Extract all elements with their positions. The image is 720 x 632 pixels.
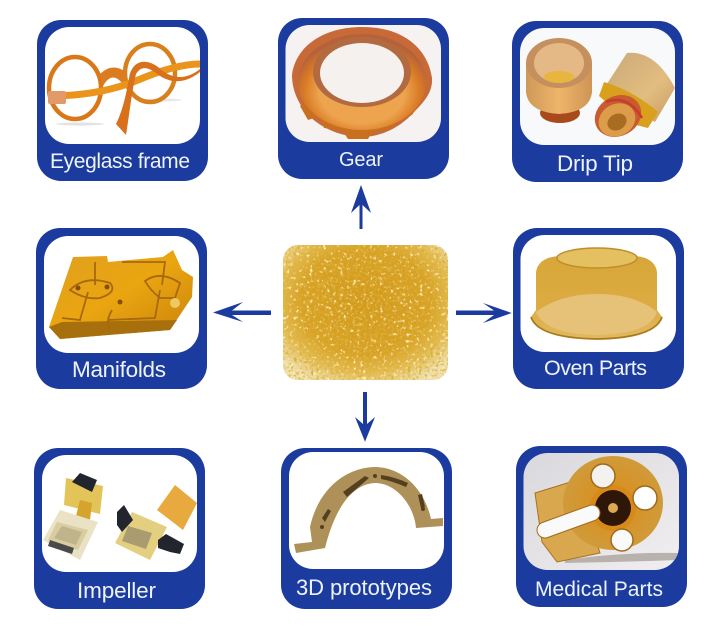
arrow: down to 3D prototypes (355, 392, 375, 442)
arrow: right to Oven Parts (456, 303, 512, 323)
card background (36, 228, 207, 389)
label: Gear (339, 149, 383, 171)
photo: manifold block (44, 236, 199, 353)
photo: impeller parts (42, 455, 197, 572)
card background (512, 21, 683, 182)
card background (34, 448, 205, 609)
photo: oven dome (520, 235, 677, 352)
label: Impeller (77, 578, 156, 603)
card background (281, 448, 452, 609)
panel: 3D prototypes (281, 448, 452, 609)
photo: gear ring (285, 25, 442, 142)
label: Drip Tip (557, 151, 633, 176)
photo: eyeglass frame (45, 27, 200, 144)
card background (513, 228, 684, 389)
panel: Impeller (34, 448, 205, 609)
central image: amber pellets (283, 245, 448, 380)
photo: arch part (289, 452, 444, 569)
panel: Gear (278, 18, 449, 179)
label: 3D prototypes (296, 575, 432, 600)
label: Medical Parts (535, 578, 663, 601)
arrow: left to Manifolds (213, 302, 271, 322)
photo: medical part (523, 453, 680, 570)
panel: Eyeglass frame (37, 20, 208, 181)
card background (516, 446, 687, 607)
panel: Manifolds (36, 228, 207, 389)
panel: Drip Tip (512, 21, 683, 182)
photo: drip tips (520, 28, 675, 145)
label: Manifolds (72, 357, 166, 382)
panel: Oven Parts (513, 228, 684, 389)
arrow: up to Gear (351, 185, 371, 229)
card background (278, 18, 449, 179)
label: Eyeglass frame (50, 150, 190, 173)
card background (37, 20, 208, 181)
label: Oven Parts (544, 356, 647, 380)
panel: Medical Parts (516, 446, 687, 607)
